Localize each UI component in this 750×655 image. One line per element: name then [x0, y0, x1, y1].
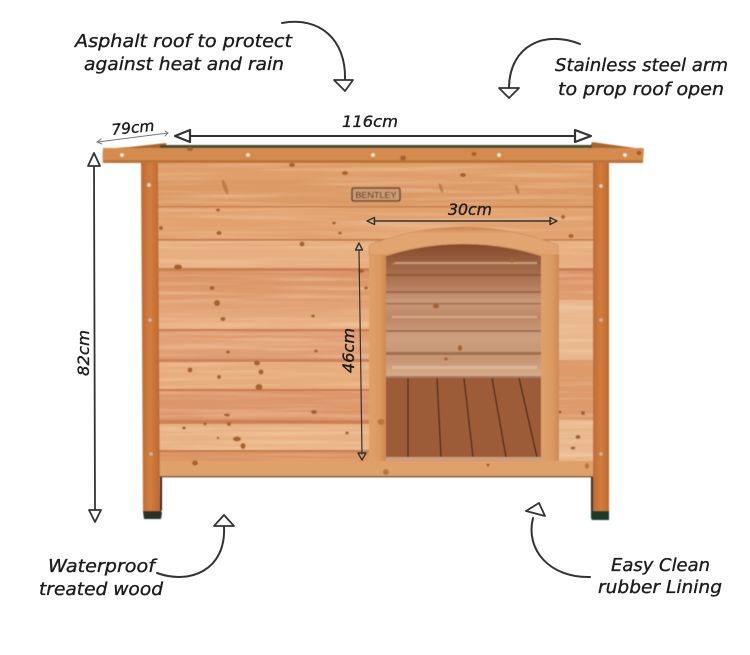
- dimension: door width 30cm: [367, 200, 557, 224]
- dimension: width 116cm: [175, 112, 591, 142]
- maker badge: [352, 188, 400, 201]
- left post: [141, 163, 162, 519]
- dimension: door height 46cm: 46cm: [339, 328, 358, 373]
- dimension: width 116cm: 116cm: [342, 112, 398, 131]
- callout: stainless steel arm: Stainless steel arm: [555, 55, 728, 76]
- wooden front wall planks: [158, 163, 594, 477]
- door opening: [386, 244, 541, 461]
- callout: asphalt roof: [74, 22, 353, 91]
- callout: rubber lining: [526, 503, 722, 598]
- asphalt roof: [102, 142, 644, 163]
- callout: waterproof wood: Waterproof: [48, 556, 158, 577]
- callout: rubber lining: Easy Clean: [611, 555, 710, 576]
- callout: rubber lining: rubber Lining: [598, 577, 722, 598]
- dimension: depth 79cm: 79cm: [111, 117, 155, 139]
- bottom rail: [158, 460, 593, 477]
- doghouse photo: [102, 142, 644, 520]
- callout: stainless steel arm: to prop roof open: [558, 79, 724, 100]
- wall knots: [159, 163, 585, 450]
- dimension: door width 30cm: 30cm: [448, 200, 492, 219]
- dimension: depth 79cm: [97, 117, 168, 144]
- callout: waterproof wood: treated wood: [39, 579, 164, 600]
- right post: [591, 163, 609, 520]
- door frame: [369, 227, 559, 461]
- callout: stainless steel arm: [499, 39, 728, 100]
- dimension: door height 46cm: [339, 243, 366, 460]
- maker badge: BENTLEY: [356, 190, 397, 200]
- callout: waterproof wood: [39, 515, 234, 600]
- callout: asphalt roof: against heat and rain: [84, 54, 284, 75]
- dimension: height 82cm: 82cm: [74, 330, 93, 376]
- callout: asphalt roof: Asphalt roof to protect: [74, 31, 293, 52]
- dimension: height 82cm: [74, 153, 101, 522]
